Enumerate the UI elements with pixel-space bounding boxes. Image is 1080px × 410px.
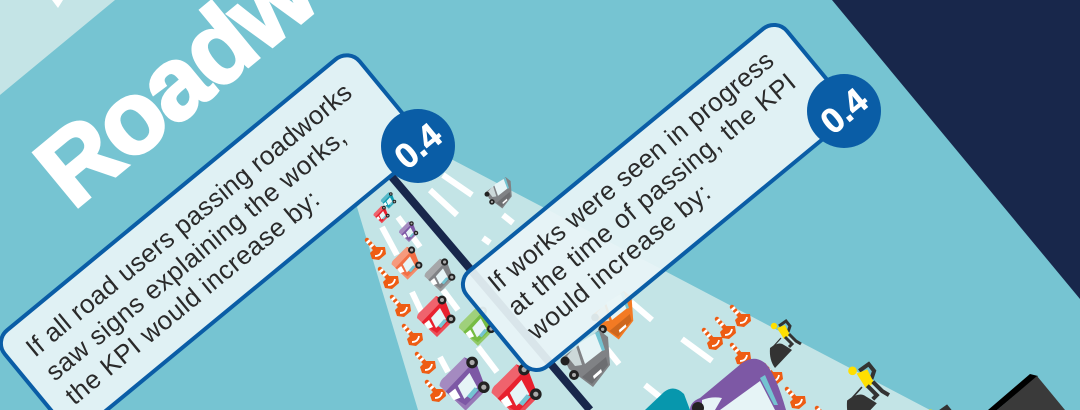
traffic cones (366, 239, 836, 410)
central road line (392, 177, 590, 410)
callout text: at the time of passing, the KPI (501, 67, 801, 322)
light road band top left (0, 0, 115, 95)
callout text: would increase by: (520, 177, 716, 346)
callout: signs explaining the works (0, 48, 455, 410)
callout text: saw signs explaining the works, (39, 122, 352, 387)
callout: works in progress (456, 18, 881, 377)
highlighted road wedge (357, 145, 930, 410)
callout box (0, 48, 428, 410)
road illustration (357, 145, 1065, 410)
value badge: 0.4 (387, 116, 450, 177)
callout box (456, 18, 854, 377)
lane markings (382, 175, 712, 397)
dark sign (988, 374, 1065, 410)
navy corner panel (832, 0, 1080, 299)
value badge (807, 74, 881, 148)
value badge (381, 109, 455, 183)
cars (373, 177, 786, 410)
road workers (770, 321, 967, 410)
callout text: If works were seen in progress (482, 45, 779, 298)
value badge: 0.4 (813, 81, 876, 142)
callout text: If all road users passing roadworks (20, 77, 357, 363)
callout text: the KPI would increase by: (59, 184, 325, 410)
